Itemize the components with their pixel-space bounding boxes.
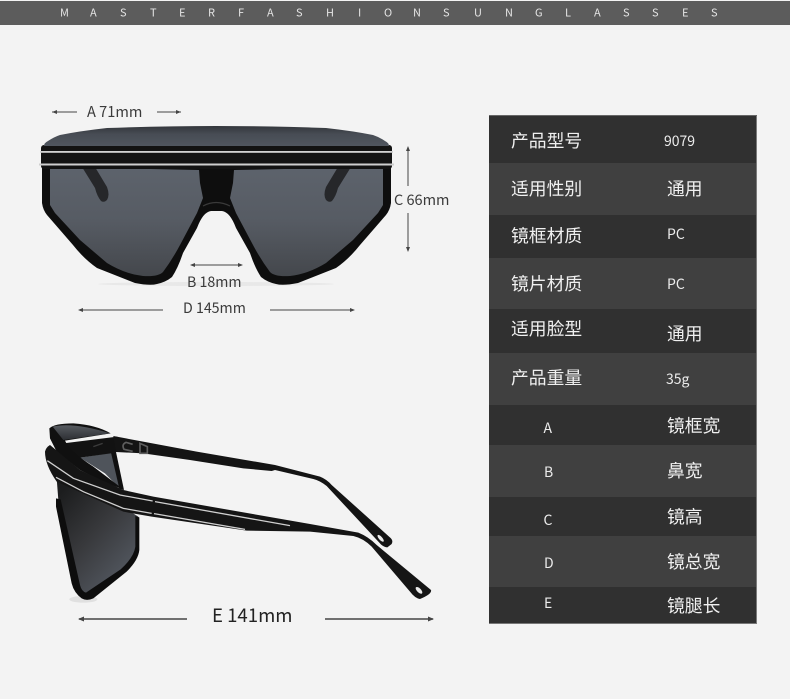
letter keys: D bbox=[544, 553, 554, 573]
value labels: 镜框宽 bbox=[667, 412, 721, 438]
values: PC bbox=[667, 224, 685, 244]
left column labels: 适用脸型 bbox=[511, 315, 582, 341]
upper temple hole bbox=[377, 534, 385, 543]
visor lens bbox=[44, 126, 389, 146]
upper temple bbox=[113, 436, 392, 547]
values: 9079 bbox=[664, 131, 695, 151]
letter keys: B bbox=[544, 462, 553, 482]
dimension C bbox=[394, 146, 449, 252]
value labels: 镜总宽 bbox=[667, 548, 721, 574]
lower band bbox=[45, 445, 431, 599]
letter keys: E bbox=[544, 593, 552, 613]
specification table bbox=[489, 115, 757, 624]
lens rim behind visor bbox=[111, 452, 124, 490]
dimension E bbox=[78, 601, 434, 628]
header text: MASTERFASHIONSUNGLASSES bbox=[60, 4, 718, 20]
hinge interior detail bbox=[93, 443, 103, 447]
dimension A: A 71mm bbox=[87, 101, 142, 122]
right temple through lens bbox=[324, 167, 351, 202]
front shadow bbox=[98, 282, 334, 286]
visor lens side bbox=[53, 425, 110, 440]
side lens bbox=[57, 478, 138, 594]
values: 35g bbox=[666, 369, 690, 389]
table rows bbox=[489, 115, 757, 624]
letter keys: A bbox=[544, 418, 552, 438]
header bar bbox=[0, 1, 790, 25]
left lens bbox=[50, 167, 203, 276]
value labels bbox=[667, 175, 721, 618]
side view sunglasses bbox=[45, 423, 431, 603]
visor outer bbox=[49, 423, 123, 489]
values: PC bbox=[667, 274, 685, 294]
left temple through lens bbox=[82, 167, 108, 202]
brow band bbox=[41, 145, 392, 169]
hinge interior bbox=[63, 437, 117, 458]
left column labels: 产品重量 bbox=[511, 364, 582, 390]
left column labels bbox=[511, 127, 582, 390]
dimension A bbox=[52, 101, 181, 122]
silver line upper bbox=[40, 151, 393, 153]
dimension C: C 66mm bbox=[394, 189, 449, 210]
value labels: 镜腿长 bbox=[667, 592, 721, 618]
lens behind visor bbox=[80, 453, 121, 489]
dimension B: B 18mm bbox=[187, 272, 242, 292]
dimension E: E 141mm bbox=[212, 601, 293, 628]
left column labels: 镜框材质 bbox=[511, 222, 582, 248]
value labels: 鼻宽 bbox=[667, 457, 703, 483]
value labels: 通用 bbox=[667, 175, 703, 201]
letter keys: C bbox=[544, 510, 552, 530]
front frame bbox=[42, 166, 391, 285]
side rim bbox=[56, 498, 139, 600]
front view sunglasses bbox=[39, 126, 394, 286]
value labels: 镜高 bbox=[667, 503, 703, 529]
right lens bbox=[230, 167, 383, 276]
nose highlight bbox=[203, 202, 230, 206]
dimension B bbox=[187, 263, 243, 292]
left column labels: 适用性别 bbox=[511, 175, 582, 201]
dimension D: D 145mm bbox=[183, 298, 246, 318]
value labels: 通用 bbox=[667, 320, 703, 346]
left column labels: 产品型号 bbox=[511, 127, 582, 153]
dimension D bbox=[78, 298, 355, 318]
values bbox=[664, 131, 695, 389]
letter keys bbox=[544, 418, 554, 613]
silver line side lower bbox=[56, 477, 245, 529]
left column labels: 镜片材质 bbox=[511, 270, 582, 296]
silver line lower bbox=[39, 164, 394, 166]
silver line side upper bbox=[47, 461, 290, 526]
lower temple hole bbox=[415, 586, 423, 595]
hinge icon bbox=[123, 442, 147, 453]
side shadow bbox=[69, 596, 97, 603]
